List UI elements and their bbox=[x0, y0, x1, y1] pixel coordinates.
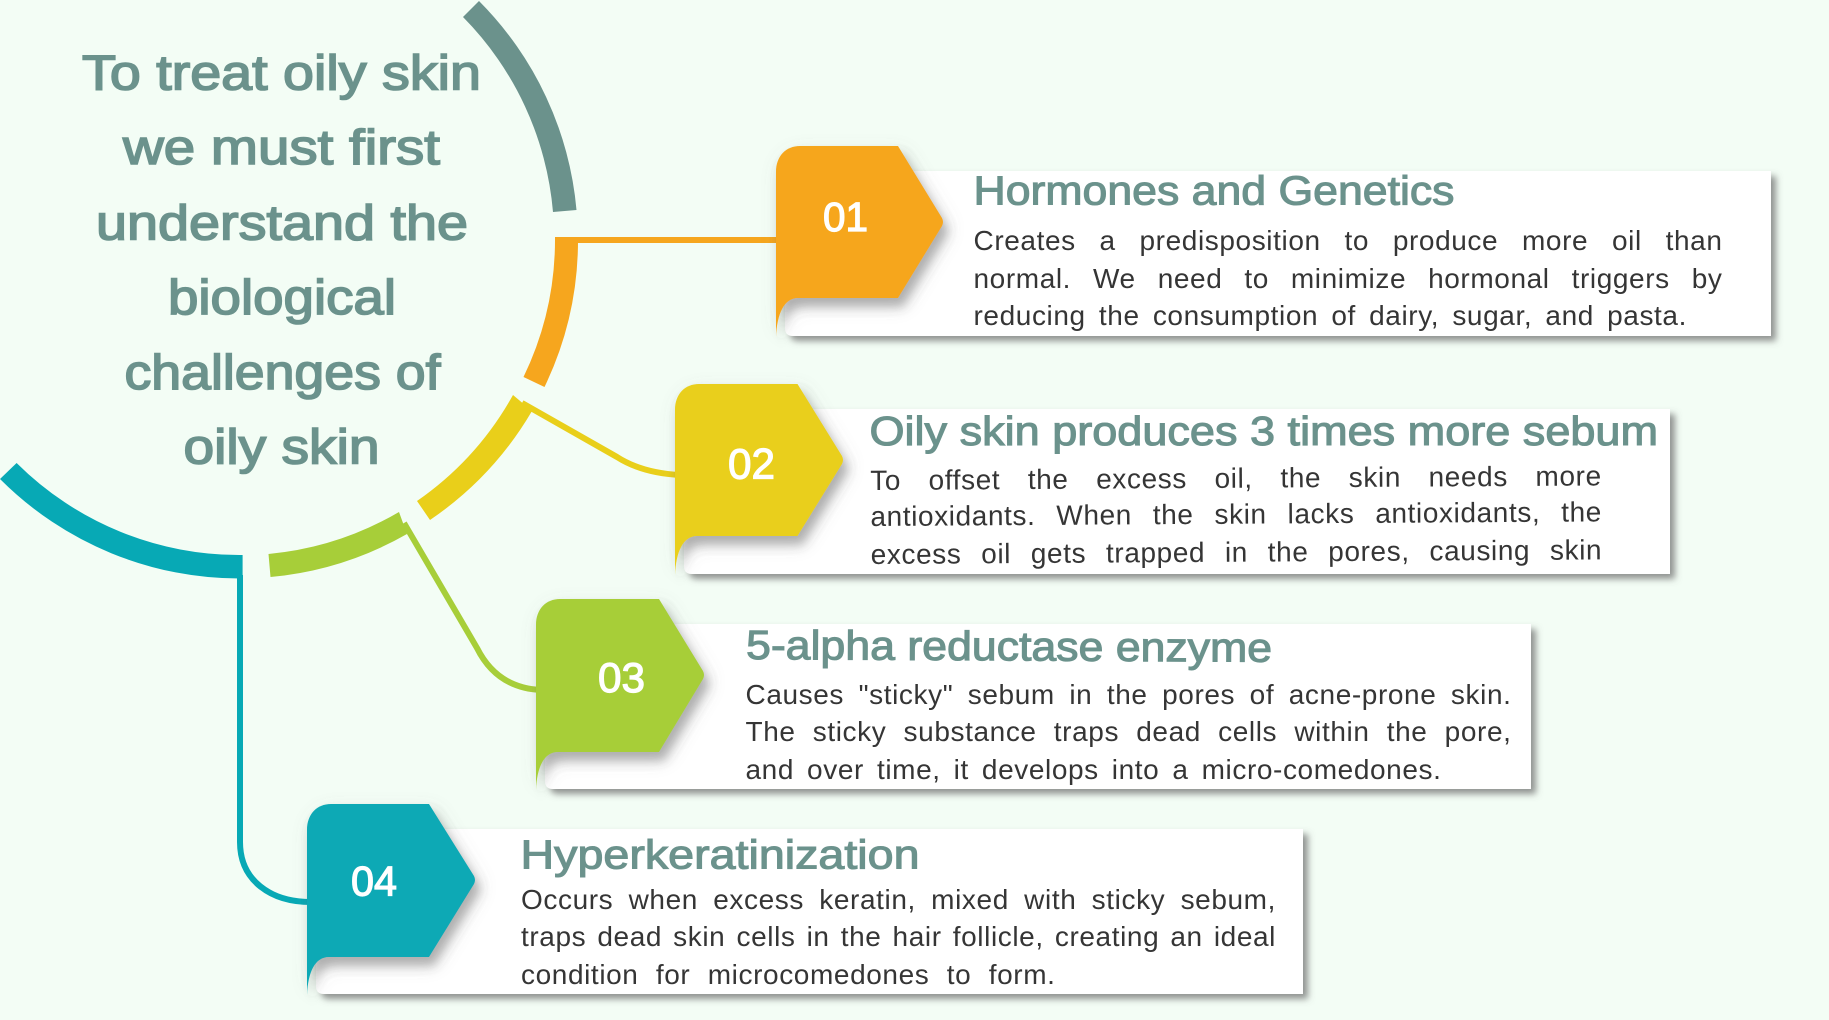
body text: To offset the excess oil, the skin needs more bbox=[870, 460, 1602, 496]
main heading: biological bbox=[168, 271, 396, 325]
card panel bbox=[785, 171, 1771, 336]
number 02: 02 bbox=[728, 440, 775, 488]
connector: teal bbox=[240, 575, 311, 902]
segmented ring bbox=[0, 1, 578, 579]
number 04: 04 bbox=[351, 858, 397, 905]
body text: Occurs when excess keratin, mixed with sticky sebum, bbox=[521, 884, 1276, 915]
connector: yellow bbox=[522, 403, 680, 475]
main heading: understand the bbox=[96, 196, 468, 250]
main heading bbox=[82, 46, 481, 474]
badge 03 bbox=[536, 599, 704, 790]
body text: normal. We need to minimize hormonal triggers by bbox=[974, 263, 1722, 294]
badge 04 bbox=[307, 804, 475, 995]
body text: and over time, it develops into a micro-comedones. bbox=[746, 754, 1442, 785]
body text: Causes "sticky" sebum in the pores of acne-prone skin. bbox=[746, 679, 1512, 710]
card 03 bbox=[536, 599, 1531, 790]
badge 01 bbox=[776, 146, 943, 337]
arc: green bbox=[268, 512, 407, 577]
heading: Hormones and Genetics bbox=[974, 168, 1454, 214]
badge 02 bbox=[675, 384, 843, 575]
main heading: we must first bbox=[122, 121, 440, 175]
body text: The sticky substance traps dead cells within the pore, bbox=[746, 716, 1512, 747]
body text: excess oil gets trapped in the pores, causing skin bbox=[871, 535, 1602, 570]
main heading: To treat oily skin bbox=[82, 46, 481, 100]
arc: teal bbox=[0, 463, 243, 579]
card 02 bbox=[675, 384, 1670, 575]
body text bbox=[870, 459, 1605, 574]
body text: traps dead skin cells in the hair follicle, creating an ideal bbox=[521, 921, 1276, 952]
card panel bbox=[316, 829, 1303, 994]
number 03: 03 bbox=[598, 654, 645, 701]
card 04 bbox=[307, 804, 1303, 995]
body text: Creates a predisposition to produce more oil than bbox=[974, 225, 1722, 256]
arc: yellow bbox=[417, 395, 532, 520]
heading: Hyperkeratinization bbox=[520, 832, 920, 878]
body text: reducing the consumption of dairy, sugar, and pasta. bbox=[974, 300, 1687, 331]
number 01: 01 bbox=[823, 194, 868, 240]
arc: gray bbox=[463, 1, 576, 212]
main heading: oily skin bbox=[184, 420, 380, 474]
heading: 5-alpha reductase enzyme bbox=[746, 622, 1272, 671]
card 01 bbox=[776, 146, 1771, 337]
main heading: challenges of bbox=[124, 346, 441, 400]
card panel bbox=[684, 409, 1670, 574]
heading: Oily skin produces 3 times more sebum bbox=[870, 408, 1658, 454]
body text bbox=[521, 884, 1279, 994]
body text: condition for microcomedones to form. bbox=[521, 959, 1056, 990]
connector: green bbox=[404, 523, 541, 690]
connector: orange bbox=[555, 237, 780, 243]
arc: orange bbox=[524, 237, 578, 387]
card panel bbox=[545, 624, 1531, 789]
body text bbox=[746, 679, 1514, 789]
body text: antioxidants. When the skin lacks antioxidants, the bbox=[870, 497, 1602, 532]
body text bbox=[974, 224, 1726, 334]
